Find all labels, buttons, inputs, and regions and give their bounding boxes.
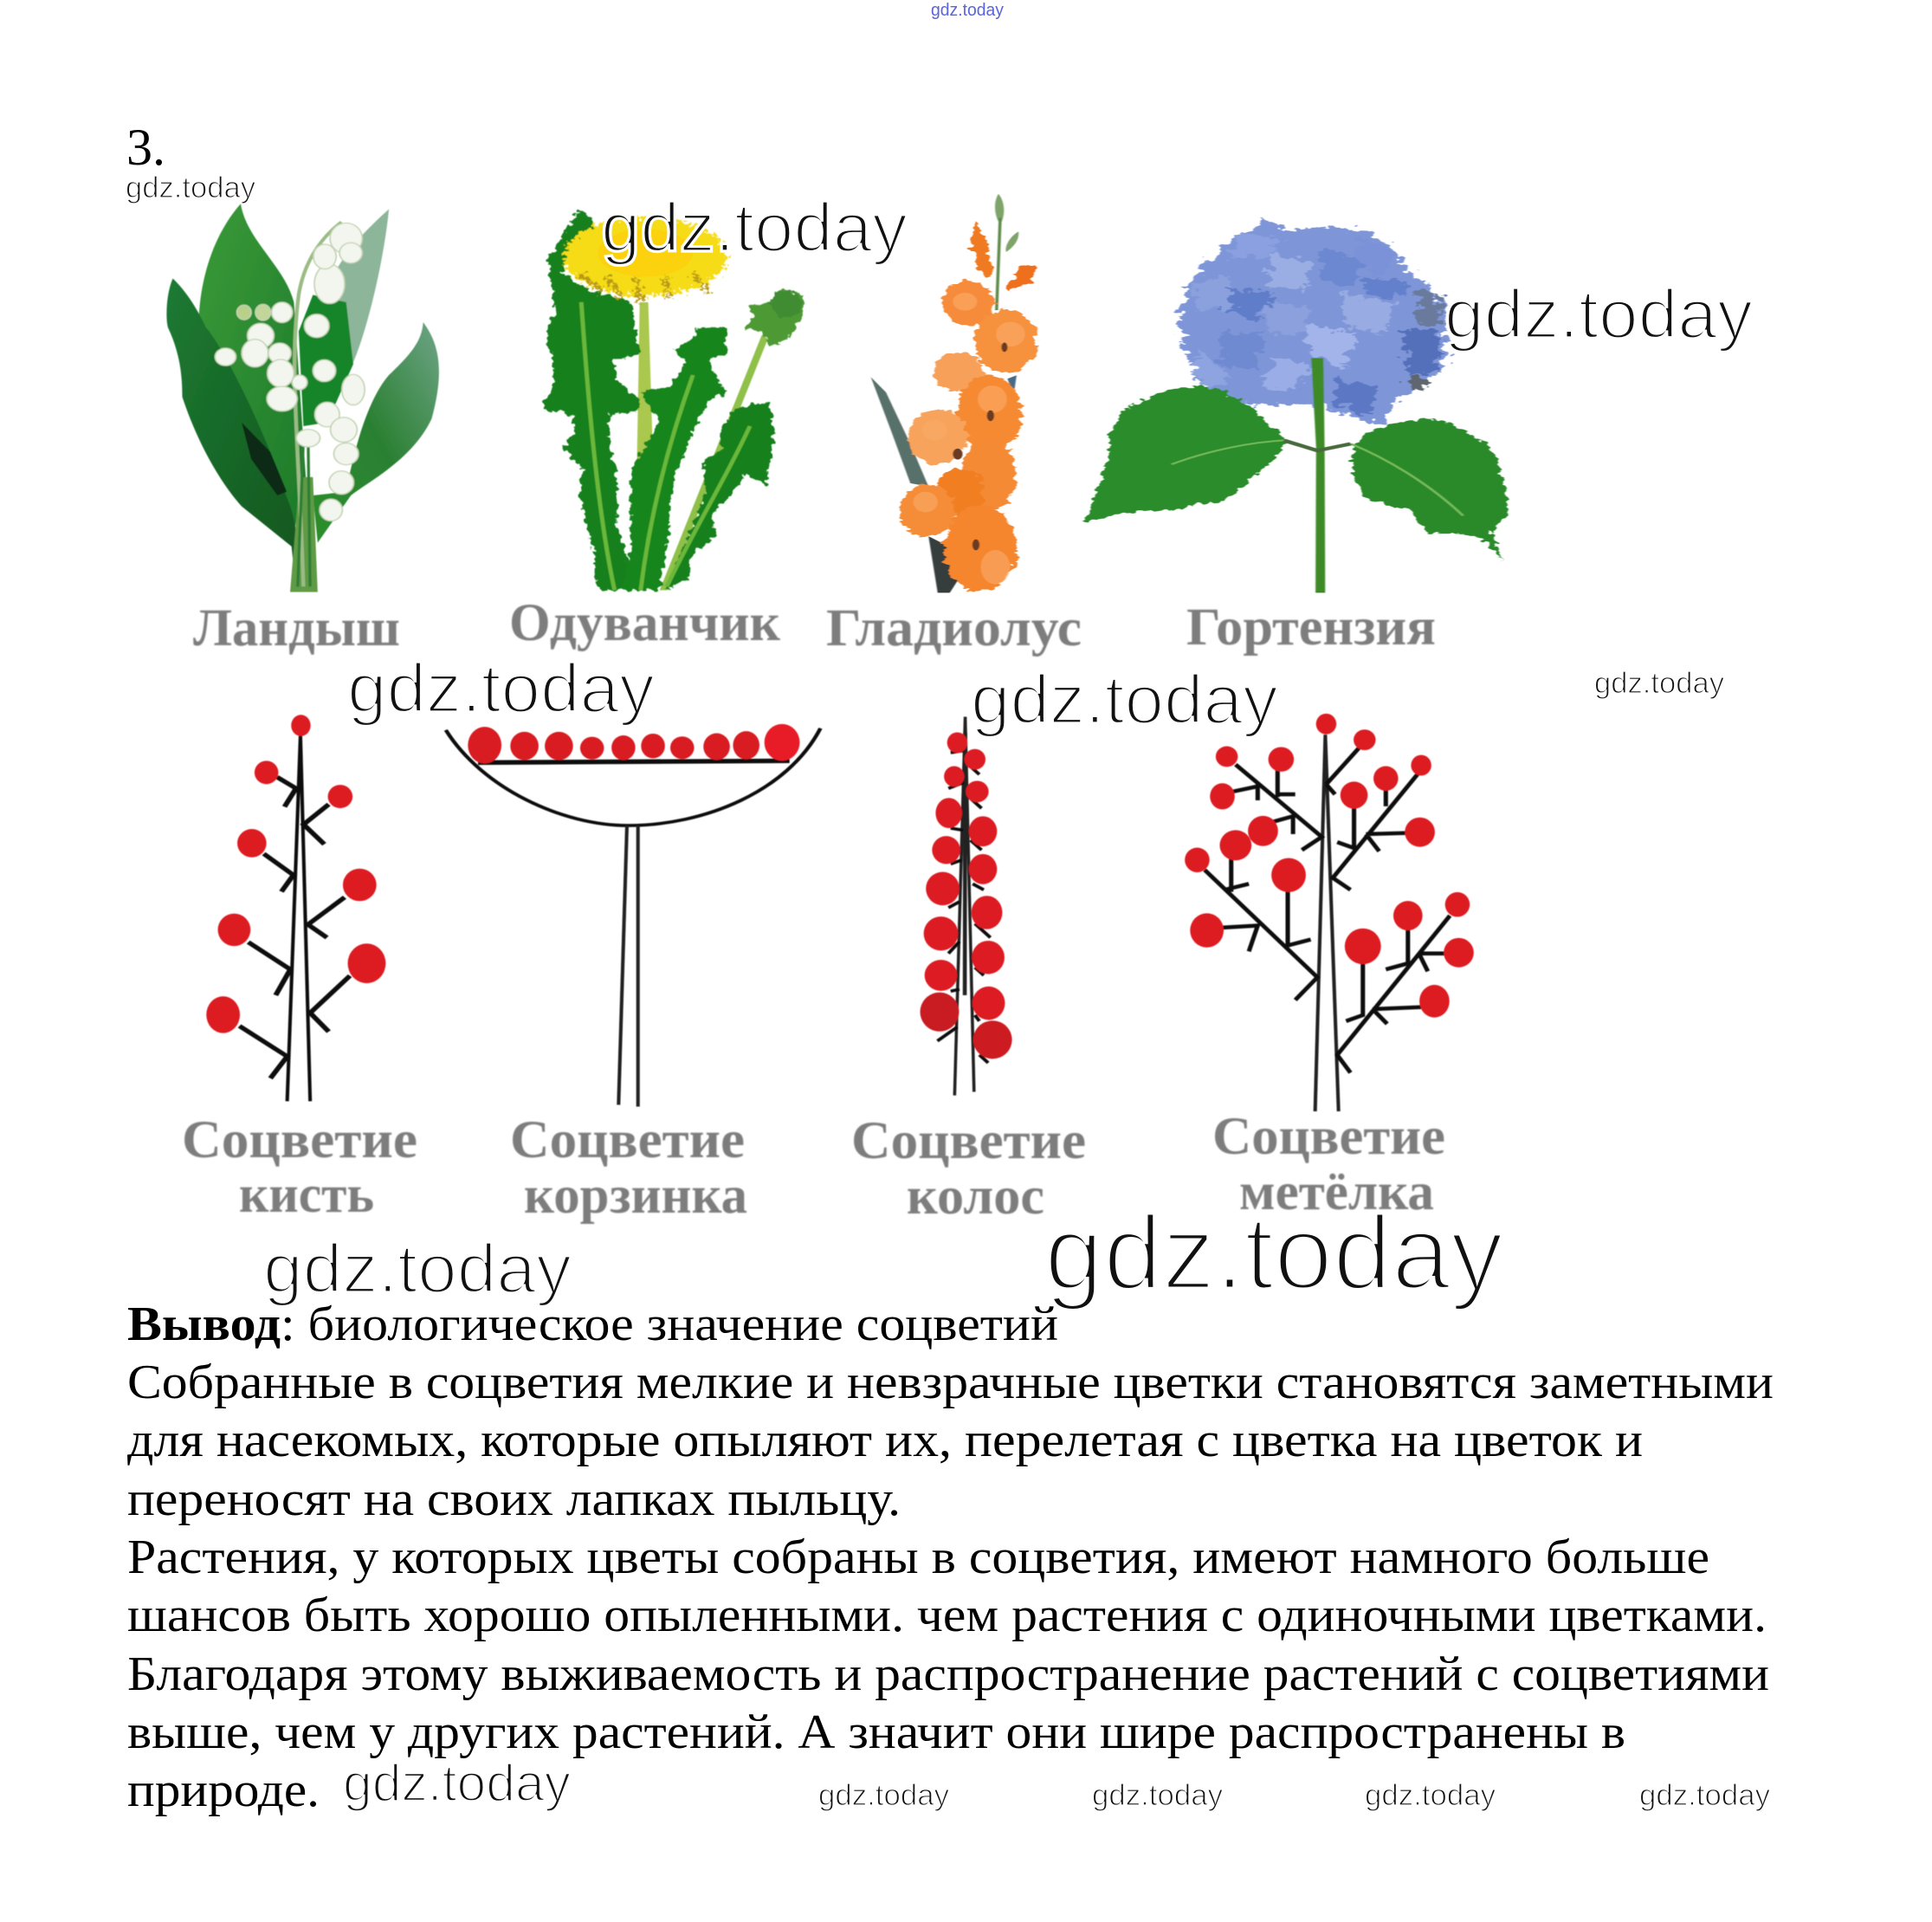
flower head bbox=[564, 217, 727, 302]
plant captions bbox=[193, 594, 1436, 657]
conclusion text: природе. bbox=[127, 1763, 320, 1817]
grey leaf bbox=[871, 377, 928, 487]
watermark: bottom 2: gdz.today bbox=[1092, 1779, 1223, 1812]
caption: Соцветие колос: колос bbox=[907, 1168, 1044, 1226]
diagram: spike bbox=[921, 717, 1012, 1096]
right leaf bbox=[1351, 418, 1509, 560]
watermark: small right: gdz.today bbox=[1594, 667, 1724, 700]
left leaf bbox=[541, 210, 641, 590]
caption: Соцветие корзинка: Соцветие bbox=[510, 1111, 745, 1169]
left leaf bbox=[1083, 387, 1287, 521]
right leaf bbox=[313, 322, 439, 543]
watermark: beside hydrangea: gdz.today bbox=[1444, 275, 1753, 353]
watermark: row two centre: gdz.today bbox=[971, 661, 1278, 738]
caption: Соцветие метёлка: Соцветие bbox=[1212, 1108, 1445, 1166]
caption: Соцветие корзинка: корзинка bbox=[524, 1167, 747, 1225]
caption: Соцветие кисть: Соцветие bbox=[182, 1111, 417, 1169]
shadow bbox=[242, 423, 287, 495]
ticks bbox=[937, 751, 991, 1063]
stem bbox=[1315, 735, 1339, 1111]
plant: lily of the valley bbox=[166, 204, 439, 592]
watermark: under number: gdz.today bbox=[126, 171, 255, 204]
caption: Ландыш: Ландыш bbox=[193, 599, 400, 657]
conclusion text bbox=[127, 1298, 1774, 1817]
plant: gladiolus bbox=[871, 194, 1037, 592]
middle leaf bbox=[622, 327, 727, 590]
diagram: basket bbox=[446, 724, 820, 1107]
conclusion text: переносят на своих лапках пыльцу. bbox=[127, 1472, 901, 1526]
caption: Соцветие кисть: кисть bbox=[239, 1166, 374, 1224]
watermark: huge: gdz.today bbox=[1044, 1194, 1503, 1311]
watermark: beside last word: gdz.today bbox=[343, 1754, 571, 1812]
watermark: lower left: gdz.today bbox=[263, 1230, 572, 1307]
watermark: bottom 4: gdz.today bbox=[1639, 1779, 1770, 1812]
flowers bbox=[468, 724, 799, 764]
flowers bbox=[206, 715, 385, 1033]
caption: Соцветие кисть bbox=[182, 1111, 417, 1224]
diagram: raceme bbox=[206, 715, 385, 1101]
petals bbox=[1269, 256, 1311, 289]
flowers bbox=[921, 732, 1012, 1058]
left dark leaf bbox=[166, 279, 298, 592]
conclusion text: Растения, у которых цветы собраны в соцветия, имеют намного больше bbox=[127, 1530, 1709, 1584]
leaf veins and petioles bbox=[1172, 440, 1464, 515]
caption: Соцветие метёлка: метёлка bbox=[1239, 1163, 1434, 1221]
watermark: over dandelion: gdz.today bbox=[601, 189, 908, 266]
conclusion text: Вывод: биологическое значение соцветий bbox=[127, 1298, 1058, 1351]
plant: hydrangea bbox=[1083, 221, 1509, 592]
flower head bbox=[1179, 221, 1446, 425]
orange flowers bbox=[900, 221, 1037, 591]
watermark: row two left: gdz.today bbox=[347, 650, 655, 727]
stems bbox=[290, 477, 318, 592]
caption: Гладиолус: Гладиолус bbox=[826, 599, 1082, 657]
flower highlights bbox=[914, 293, 1025, 584]
back grey-green leaf bbox=[332, 210, 389, 368]
conclusion text: Собранные в соцветия мелкие и невзрачные цветки становятся заметными bbox=[127, 1356, 1774, 1409]
task number: 3. bbox=[126, 119, 165, 176]
caption: Соцветие колос bbox=[851, 1112, 1086, 1226]
inner green leaf bbox=[299, 294, 353, 426]
stem bbox=[1311, 359, 1325, 592]
conclusion text: шансов быть хорошо опыленными. чем растения с одиночными цветками. bbox=[127, 1589, 1767, 1642]
stalk bbox=[618, 825, 638, 1107]
conclusion text: выше, чем у других растений. А значит они шире распространены в bbox=[127, 1705, 1625, 1759]
watermark: top blue: gdz.today bbox=[931, 1, 1004, 20]
diagram: panicle bbox=[1185, 714, 1474, 1111]
leaf veins bbox=[581, 302, 750, 590]
conclusion text: Благодаря этому выживаемость и распространение растений с соцветиями bbox=[127, 1647, 1769, 1701]
centre back leaf bbox=[199, 204, 306, 532]
caption: Соцветие метёлка bbox=[1212, 1108, 1445, 1221]
bud stem bbox=[660, 335, 768, 590]
shoots bbox=[995, 194, 1018, 252]
plant: dandelion bbox=[541, 210, 804, 590]
branches bbox=[240, 777, 350, 1078]
caption: Соцветие корзинка bbox=[510, 1111, 747, 1225]
right leaf bbox=[664, 403, 774, 590]
receptacle bbox=[446, 728, 820, 825]
flowers bbox=[1185, 714, 1474, 1018]
dark throats bbox=[953, 342, 1007, 550]
bud bbox=[745, 288, 804, 346]
leaves bbox=[541, 210, 774, 590]
caption: Соцветие колос: Соцветие bbox=[851, 1112, 1086, 1170]
stem bbox=[288, 735, 310, 1101]
caption: Гортензия: Гортензия bbox=[1186, 599, 1436, 657]
caption: Одуванчик: Одуванчик bbox=[509, 594, 781, 652]
stem bbox=[954, 717, 974, 1096]
white bells bbox=[215, 223, 365, 521]
watermark: bottom 1: gdz.today bbox=[818, 1779, 949, 1812]
conclusion text: для насекомых, которые опыляют их, перелетая с цветка на цветок и bbox=[127, 1414, 1643, 1467]
diagram captions bbox=[182, 1108, 1445, 1226]
branches bbox=[1205, 742, 1450, 1073]
flower stem bbox=[636, 302, 653, 466]
watermark: bottom 3: gdz.today bbox=[1365, 1779, 1496, 1812]
